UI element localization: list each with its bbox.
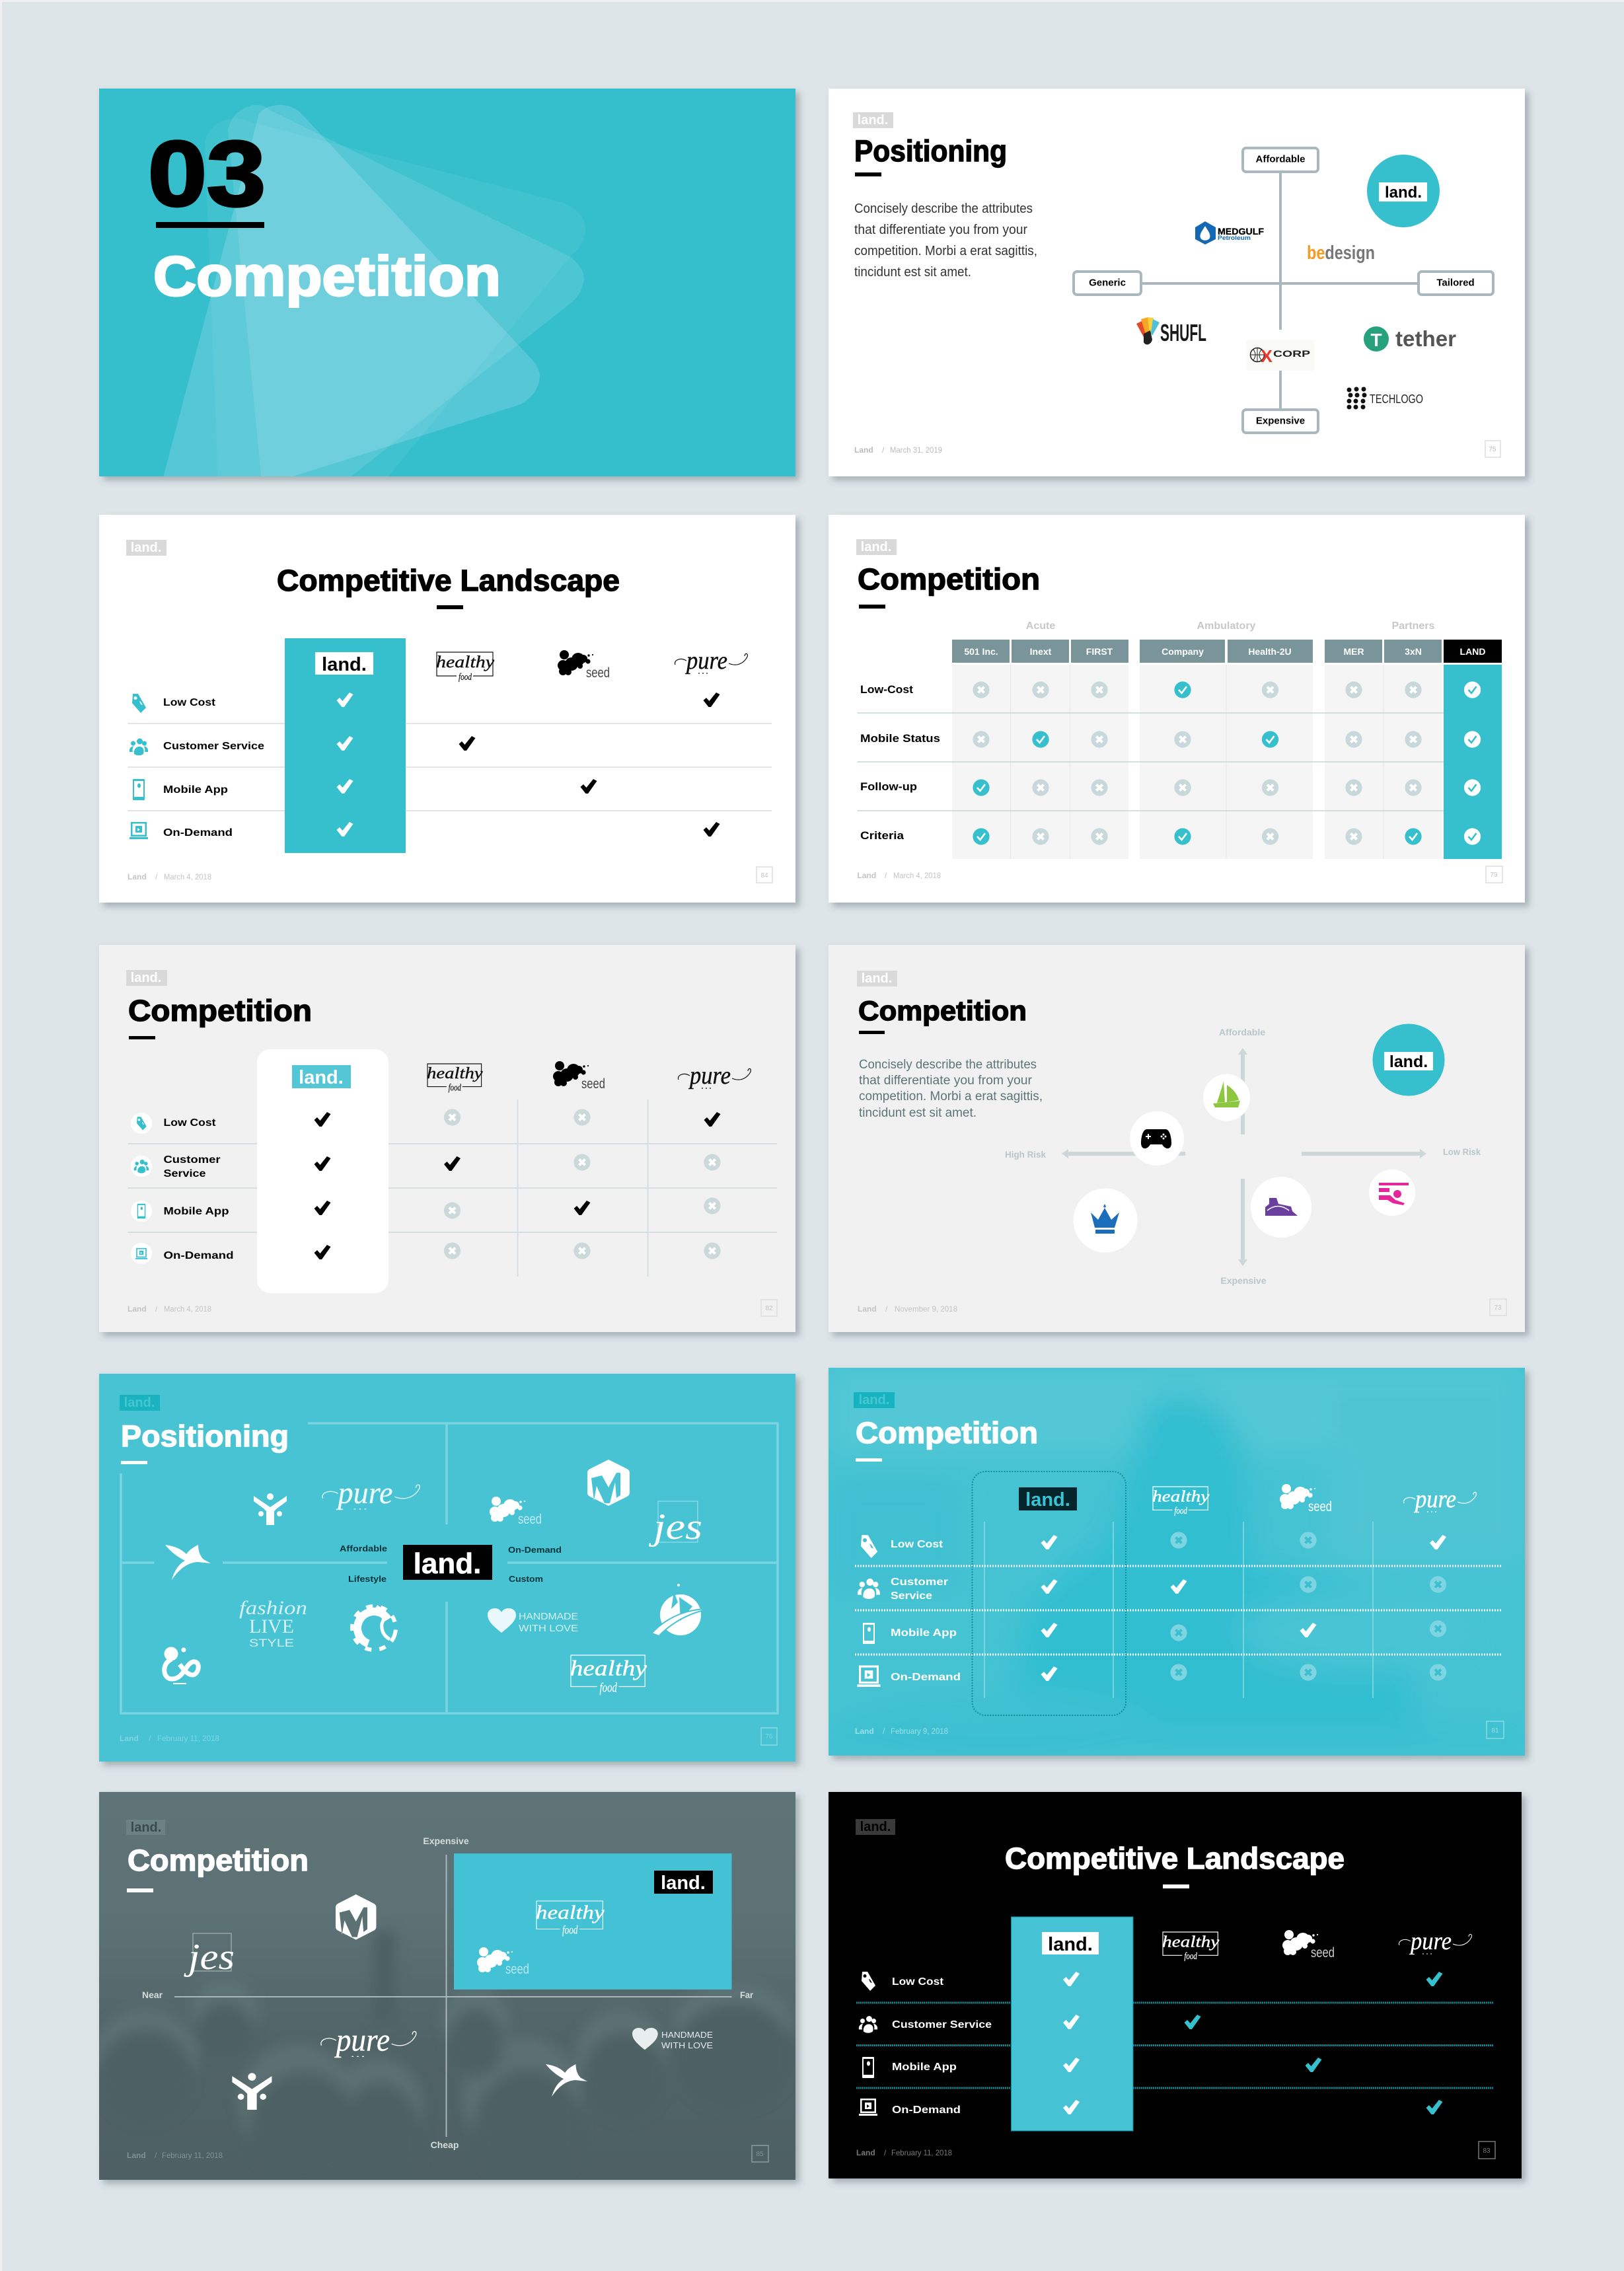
row: On-Demand: On-Demand [164, 1250, 234, 1261]
description paragraph [859, 1058, 1043, 1120]
row: Criteria: Criteria [860, 829, 904, 842]
logo: tether [1364, 326, 1456, 352]
title: Competition [858, 562, 1040, 596]
axis label: Affordable [1243, 148, 1318, 172]
logo: figure [254, 1493, 287, 1525]
header cells: LAND [1460, 646, 1485, 657]
axis arrows [1062, 1048, 1426, 1266]
logo: fashion live style: LIVE [249, 1616, 294, 1637]
axis label: Expensive: Expensive [1256, 415, 1305, 427]
highlighted land column [1011, 1917, 1133, 2131]
axis label: Generic: Generic [1089, 278, 1126, 288]
land badge: land. [661, 1873, 706, 1894]
row: On-Demand [859, 2099, 1443, 2116]
logo: jes [649, 1501, 702, 1547]
decorative translucent triangles [162, 105, 585, 482]
axis labels: High Risk [1005, 1149, 1046, 1160]
section title: Competition [153, 245, 501, 307]
footer: February 11, 2018 [157, 1734, 219, 1743]
row: Low-Cost [860, 681, 1481, 698]
logo: healthy food [570, 1655, 647, 1695]
footer [855, 1721, 1504, 1738]
logo: fashion live style [239, 1597, 307, 1649]
logo: healthy food [1152, 1487, 1209, 1516]
row: On-Demand [858, 1664, 1446, 1687]
row: Customer Service: Customer Service [892, 2019, 992, 2030]
logo: healthy food: healthy [1152, 1488, 1209, 1506]
row: Mobile App [133, 779, 597, 800]
logo: SHUFL [1136, 317, 1206, 346]
logo: healthy food [1162, 1932, 1219, 1962]
footer: / [155, 2151, 157, 2160]
panel: positioning logo quadrants (teal) [99, 1374, 795, 1762]
axes [174, 1855, 732, 2137]
logo: pure: pure [684, 647, 727, 675]
title: Competition [858, 995, 1027, 1026]
logo: handmade with love [488, 1608, 578, 1634]
quadrant grid [121, 1423, 778, 1713]
panel: competitive landscape table (white) [99, 515, 795, 903]
footer: Land [858, 1304, 877, 1314]
footer: March 4, 2018 [164, 872, 211, 881]
logo: healthy food: food [562, 1923, 578, 1937]
logo: pure: pure [1409, 1927, 1452, 1955]
footer: 73 [1494, 1304, 1502, 1312]
number underline [156, 222, 264, 228]
description paragraph: tincidunt est sit amet. [854, 265, 971, 279]
panel: near/far expensive/cheap map on dark crowd photo [92, 1792, 795, 2202]
quadrant labels: Custom [509, 1574, 543, 1584]
logo: seed [558, 650, 610, 681]
quadrant labels [340, 1544, 562, 1584]
logo: pure [1399, 1927, 1471, 1955]
footer [854, 441, 1500, 457]
brand tag: land. [131, 1820, 161, 1835]
title: Competition [856, 1416, 1038, 1450]
logo: healthy food: food [600, 1680, 617, 1695]
logo: seed: seed [581, 1076, 605, 1092]
footer: Land [120, 1734, 139, 1743]
description paragraph: competition. Morbi a erat sagittis, [854, 244, 1037, 258]
row: Mobile App: Mobile App [892, 2062, 957, 2073]
row: Customer Service: Service [891, 1590, 932, 1602]
logo: seed: seed [1308, 1499, 1332, 1514]
logo: jes: jes [184, 1937, 235, 1978]
land badge: land. [1025, 1489, 1070, 1510]
footer: 85 [756, 2151, 764, 2158]
axis labels: Low Risk [1443, 1146, 1481, 1157]
axis label: Affordable: Affordable [1255, 153, 1306, 165]
logo: SHUFL: SHUFL [1160, 319, 1206, 346]
header cells: Health-2U [1248, 646, 1292, 657]
footer: Land [856, 2148, 875, 2157]
title: Positioning [854, 134, 1007, 168]
axis label: Tailored [1419, 272, 1493, 295]
land badge [654, 1871, 713, 1894]
logo: healthy food: healthy [427, 1065, 483, 1082]
row: Mobile App: Mobile App [163, 784, 228, 796]
axis labels: Affordable [1219, 1027, 1265, 1037]
logo: fashion live style: fashion [239, 1597, 307, 1619]
description paragraph [854, 202, 1037, 279]
footer: / [149, 1734, 151, 1743]
logo: bird [546, 2064, 587, 2097]
icon: swimmer [1369, 1170, 1415, 1216]
logo: Medgulf: MEDGULF [1218, 226, 1264, 237]
axis labels [142, 1836, 753, 2150]
header cells: Company [1162, 646, 1204, 657]
highlighted land column outline [973, 1471, 1126, 1715]
footer: February 11, 2018 [891, 2148, 952, 2157]
row: Customer Service: Customer [164, 1154, 221, 1166]
header cells: Inext [1030, 646, 1052, 657]
row: On-Demand: On-Demand [891, 1672, 961, 1683]
axis labels: Cheap [431, 2140, 459, 2150]
logo: seed: seed [586, 665, 610, 681]
logo: figure [232, 2073, 272, 2110]
brand tag [854, 1392, 895, 1408]
logo: healthy food [427, 1064, 483, 1093]
panel: competitive landscape table (black) [829, 1792, 1522, 2178]
footer: 81 [1491, 1727, 1499, 1734]
background crowd photo wash [99, 1792, 795, 2101]
logo: pure: pure [688, 1062, 731, 1090]
highlighted land column: land. [1048, 1934, 1093, 1955]
footer: 83 [1483, 2147, 1491, 2155]
logo: seed: seed [1311, 1945, 1335, 1960]
logo: healthy food [436, 652, 495, 683]
header cells: MER [1343, 646, 1364, 657]
logo: healthy food: food [449, 1082, 461, 1093]
axis labels: Expensive [1220, 1275, 1267, 1286]
row: Criteria [860, 828, 1481, 845]
highlighted land column: land. [299, 1067, 344, 1088]
dotted row dividers [856, 2003, 1494, 2088]
footer: 82 [765, 1305, 773, 1312]
logo: handmade with love: HANDMADE [661, 2030, 713, 2040]
logo: globe with sail [652, 1584, 709, 1635]
brand tag: land. [124, 1396, 155, 1410]
brand tag: land. [860, 1820, 891, 1834]
footer: March 4, 2018 [893, 871, 941, 880]
footer: 75 [1489, 446, 1496, 453]
central land badge: land. [414, 1547, 481, 1580]
logo: handmade with love: WITH LOVE [519, 1623, 578, 1634]
logo: Techlogo: TECHLOGO [1370, 392, 1423, 406]
footer: Land [128, 1304, 147, 1314]
axis labels: Near [142, 1990, 163, 2000]
logo: pure: pure [334, 2022, 390, 2058]
row: Low Cost [862, 1972, 1443, 1991]
row: Customer Service: Service [164, 1168, 206, 1179]
footer: / [883, 1727, 885, 1736]
highlighted land column [257, 1049, 388, 1293]
row: Mobile App: Mobile App [164, 1206, 229, 1217]
footer: Land [854, 445, 873, 455]
logo: jes: jes [649, 1507, 702, 1547]
row: Low-Cost: Low-Cost [860, 683, 913, 696]
axis labels: Far [740, 1990, 753, 2000]
footer: / [885, 871, 887, 880]
brand tag: land. [859, 1393, 889, 1407]
description paragraph: competition. Morbi a erat sagittis, [859, 1090, 1043, 1103]
icon: bulldozer [1251, 1177, 1311, 1238]
row: Low Cost: Low Cost [891, 1539, 943, 1550]
column lines [984, 1522, 1373, 1698]
footer: February 9, 2018 [891, 1727, 948, 1736]
title: Positioning [121, 1419, 289, 1453]
footer [128, 1300, 777, 1316]
group labels [1026, 620, 1435, 632]
row: Customer Service: Customer [891, 1577, 948, 1588]
row: Low Cost: Low Cost [163, 697, 216, 708]
row: Follow-up [860, 779, 1481, 796]
brand tag: land. [131, 971, 161, 985]
logo: seed [1280, 1484, 1332, 1514]
logo: M hexagon [336, 1894, 376, 1940]
title: Competitive Landscape [1005, 1842, 1345, 1875]
land badge [1367, 155, 1440, 227]
icon: sailboat [1203, 1074, 1250, 1121]
row: Mobile App [131, 1197, 721, 1222]
logo: seed [553, 1061, 605, 1092]
logo: bedesign: bedesign [1307, 242, 1375, 264]
footer: February 11, 2018 [162, 2151, 223, 2160]
cell backgrounds [858, 665, 1502, 859]
panel: positioning matrix with logos [829, 89, 1525, 476]
land badge [1373, 1024, 1444, 1096]
icon: crown [1073, 1188, 1138, 1253]
logo: seed [477, 1947, 529, 1977]
brand tag: land. [862, 971, 892, 986]
description paragraph: tincidunt est sit amet. [859, 1106, 977, 1120]
title: Competition [128, 1843, 309, 1877]
group labels: Acute [1026, 620, 1055, 632]
row: Mobile Status: Mobile Status [860, 732, 940, 745]
header cells: 501 Inc. [964, 646, 998, 657]
row: Customer Service [859, 2015, 1201, 2033]
logo: seed [490, 1497, 542, 1527]
footer: Land [858, 871, 876, 880]
footer [128, 867, 772, 883]
row: Low Cost [132, 692, 720, 713]
footer: March 31, 2019 [890, 445, 942, 455]
logo: seed: seed [505, 1962, 529, 1977]
logo: handmade with love [632, 2028, 713, 2050]
footer: 76 [765, 1733, 773, 1740]
background photo wash [829, 1368, 1525, 1771]
row: Mobile Status [860, 731, 1481, 748]
header cells: FIRST [1086, 646, 1113, 657]
logo: Techlogo [1347, 387, 1423, 410]
footer: / [885, 1304, 888, 1314]
highlighted land column: land. [322, 654, 367, 675]
logo: healthy food: healthy [436, 653, 495, 671]
footer: Land [128, 872, 147, 881]
logo: XCORP: CORP [1273, 348, 1310, 359]
logo: M hexagon [587, 1460, 630, 1506]
row: Follow-up: Follow-up [860, 780, 917, 793]
land badge: land. [1389, 1053, 1428, 1071]
logo: healthy food: food [459, 672, 472, 683]
logo: tether: tether [1395, 326, 1456, 351]
section number: 03 [148, 122, 266, 225]
logo: pure [321, 2022, 416, 2058]
footer: Land [127, 2151, 146, 2160]
footer: 79 [1490, 872, 1498, 879]
footer [127, 2145, 768, 2162]
footer [120, 1728, 777, 1745]
axis labels: Expensive [423, 1836, 469, 1846]
logo: healthy food: food [1174, 1506, 1187, 1516]
axes [1141, 172, 1419, 410]
logo: pure: pure [1413, 1485, 1456, 1513]
axis label: Expensive [1243, 410, 1318, 433]
row: On-Demand: On-Demand [163, 827, 233, 838]
description paragraph: that differentiate you from your [854, 223, 1027, 237]
logo: XCORP: X [1261, 346, 1273, 366]
row: On-Demand [131, 1242, 721, 1264]
panel: risk vs price positioning map [829, 945, 1525, 1332]
quadrant labels: Affordable [340, 1544, 387, 1553]
row: Customer Service [131, 1154, 721, 1179]
footer: November 9, 2018 [895, 1304, 957, 1314]
description paragraph: Concisely describe the attributes [854, 202, 1033, 216]
logo: healthy food [536, 1901, 605, 1937]
panel: competition grid table [829, 515, 1525, 903]
brand tag: land. [861, 540, 891, 554]
logo: XCORP [1246, 340, 1314, 371]
logo: healthy food: healthy [570, 1657, 647, 1680]
title: Competitive Landscape [277, 564, 620, 597]
row: Low Cost [861, 1532, 1446, 1558]
logo: tether: T [1370, 330, 1382, 350]
row: Mobile App [862, 2057, 1321, 2078]
header cells [952, 640, 1502, 663]
footer: March 4, 2018 [164, 1304, 211, 1314]
panel: competition table on teal photo [829, 1368, 1525, 1771]
row: Mobile App [863, 1620, 1446, 1644]
logo: handmade with love: HANDMADE [519, 1611, 578, 1622]
header cells: 3xN [1405, 646, 1422, 657]
footer [858, 866, 1502, 883]
brand tag: land. [131, 540, 161, 555]
row: Low Cost [131, 1109, 720, 1134]
axis label: Generic [1074, 272, 1141, 295]
logo: Medgulf [1195, 221, 1264, 244]
footer: / [884, 2148, 887, 2157]
logo: bird [165, 1545, 211, 1580]
row: Low Cost: Low Cost [164, 1117, 216, 1129]
highlighted quadrant [454, 1853, 732, 1990]
logo: Medgulf: Petroleum [1218, 235, 1251, 242]
row: Low Cost: Low Cost [892, 1976, 944, 1988]
footer [858, 1299, 1506, 1316]
logo: pure [322, 1475, 420, 1510]
brand tag [126, 970, 167, 986]
highlighted land column [285, 638, 406, 853]
group labels: Partners [1392, 620, 1435, 632]
logo: pure [1403, 1485, 1476, 1513]
row: Mobile App: Mobile App [891, 1627, 957, 1639]
description paragraph: that differentiate you from your [859, 1074, 1033, 1088]
row: Customer Service [129, 736, 476, 755]
logo: seed: seed [518, 1512, 542, 1527]
logo: fashion live style: STYLE [249, 1637, 294, 1649]
group labels: Ambulatory [1197, 620, 1256, 632]
logo: healthy food: food [1184, 1951, 1197, 1962]
land badge: land. [1385, 184, 1422, 202]
logo: healthy food: healthy [536, 1902, 605, 1923]
logo: seed [1282, 1930, 1335, 1960]
logo: pure [678, 1062, 751, 1090]
quadrant labels: Lifestyle [348, 1574, 387, 1584]
row: On-Demand: On-Demand [892, 2104, 961, 2116]
footer: / [155, 1304, 158, 1314]
logo: healthy food: healthy [1162, 1933, 1219, 1951]
logo: pure: pure [336, 1475, 393, 1510]
footer: / [882, 445, 885, 455]
description paragraph: Concisely describe the attributes [859, 1058, 1037, 1072]
axis labels [1005, 1027, 1481, 1286]
row dividers [128, 724, 772, 811]
footer [856, 2141, 1495, 2159]
dotted row dividers [855, 1566, 1501, 1655]
panel: section cover 03 Competition [99, 89, 795, 482]
logo: pure [675, 647, 747, 675]
axis label: Tailored: Tailored [1436, 278, 1475, 288]
footer: / [155, 872, 158, 881]
footer: 84 [760, 872, 768, 879]
row: Customer Service: Customer Service [163, 741, 264, 752]
title: Competition [128, 994, 312, 1027]
panel: competition table (light gray) [99, 945, 795, 1332]
brand tag: land. [858, 113, 888, 128]
logo: infinity figure [165, 1649, 198, 1684]
quadrant labels: On-Demand [508, 1545, 562, 1555]
row: Customer Service [858, 1576, 1446, 1602]
row: On-Demand [129, 822, 720, 839]
icon: gamepad [1130, 1111, 1184, 1166]
logo: gear [346, 1600, 402, 1656]
logo: handmade with love: WITH LOVE [661, 2040, 713, 2050]
row dividers and column lines [128, 1099, 777, 1277]
footer: Land [855, 1727, 874, 1736]
